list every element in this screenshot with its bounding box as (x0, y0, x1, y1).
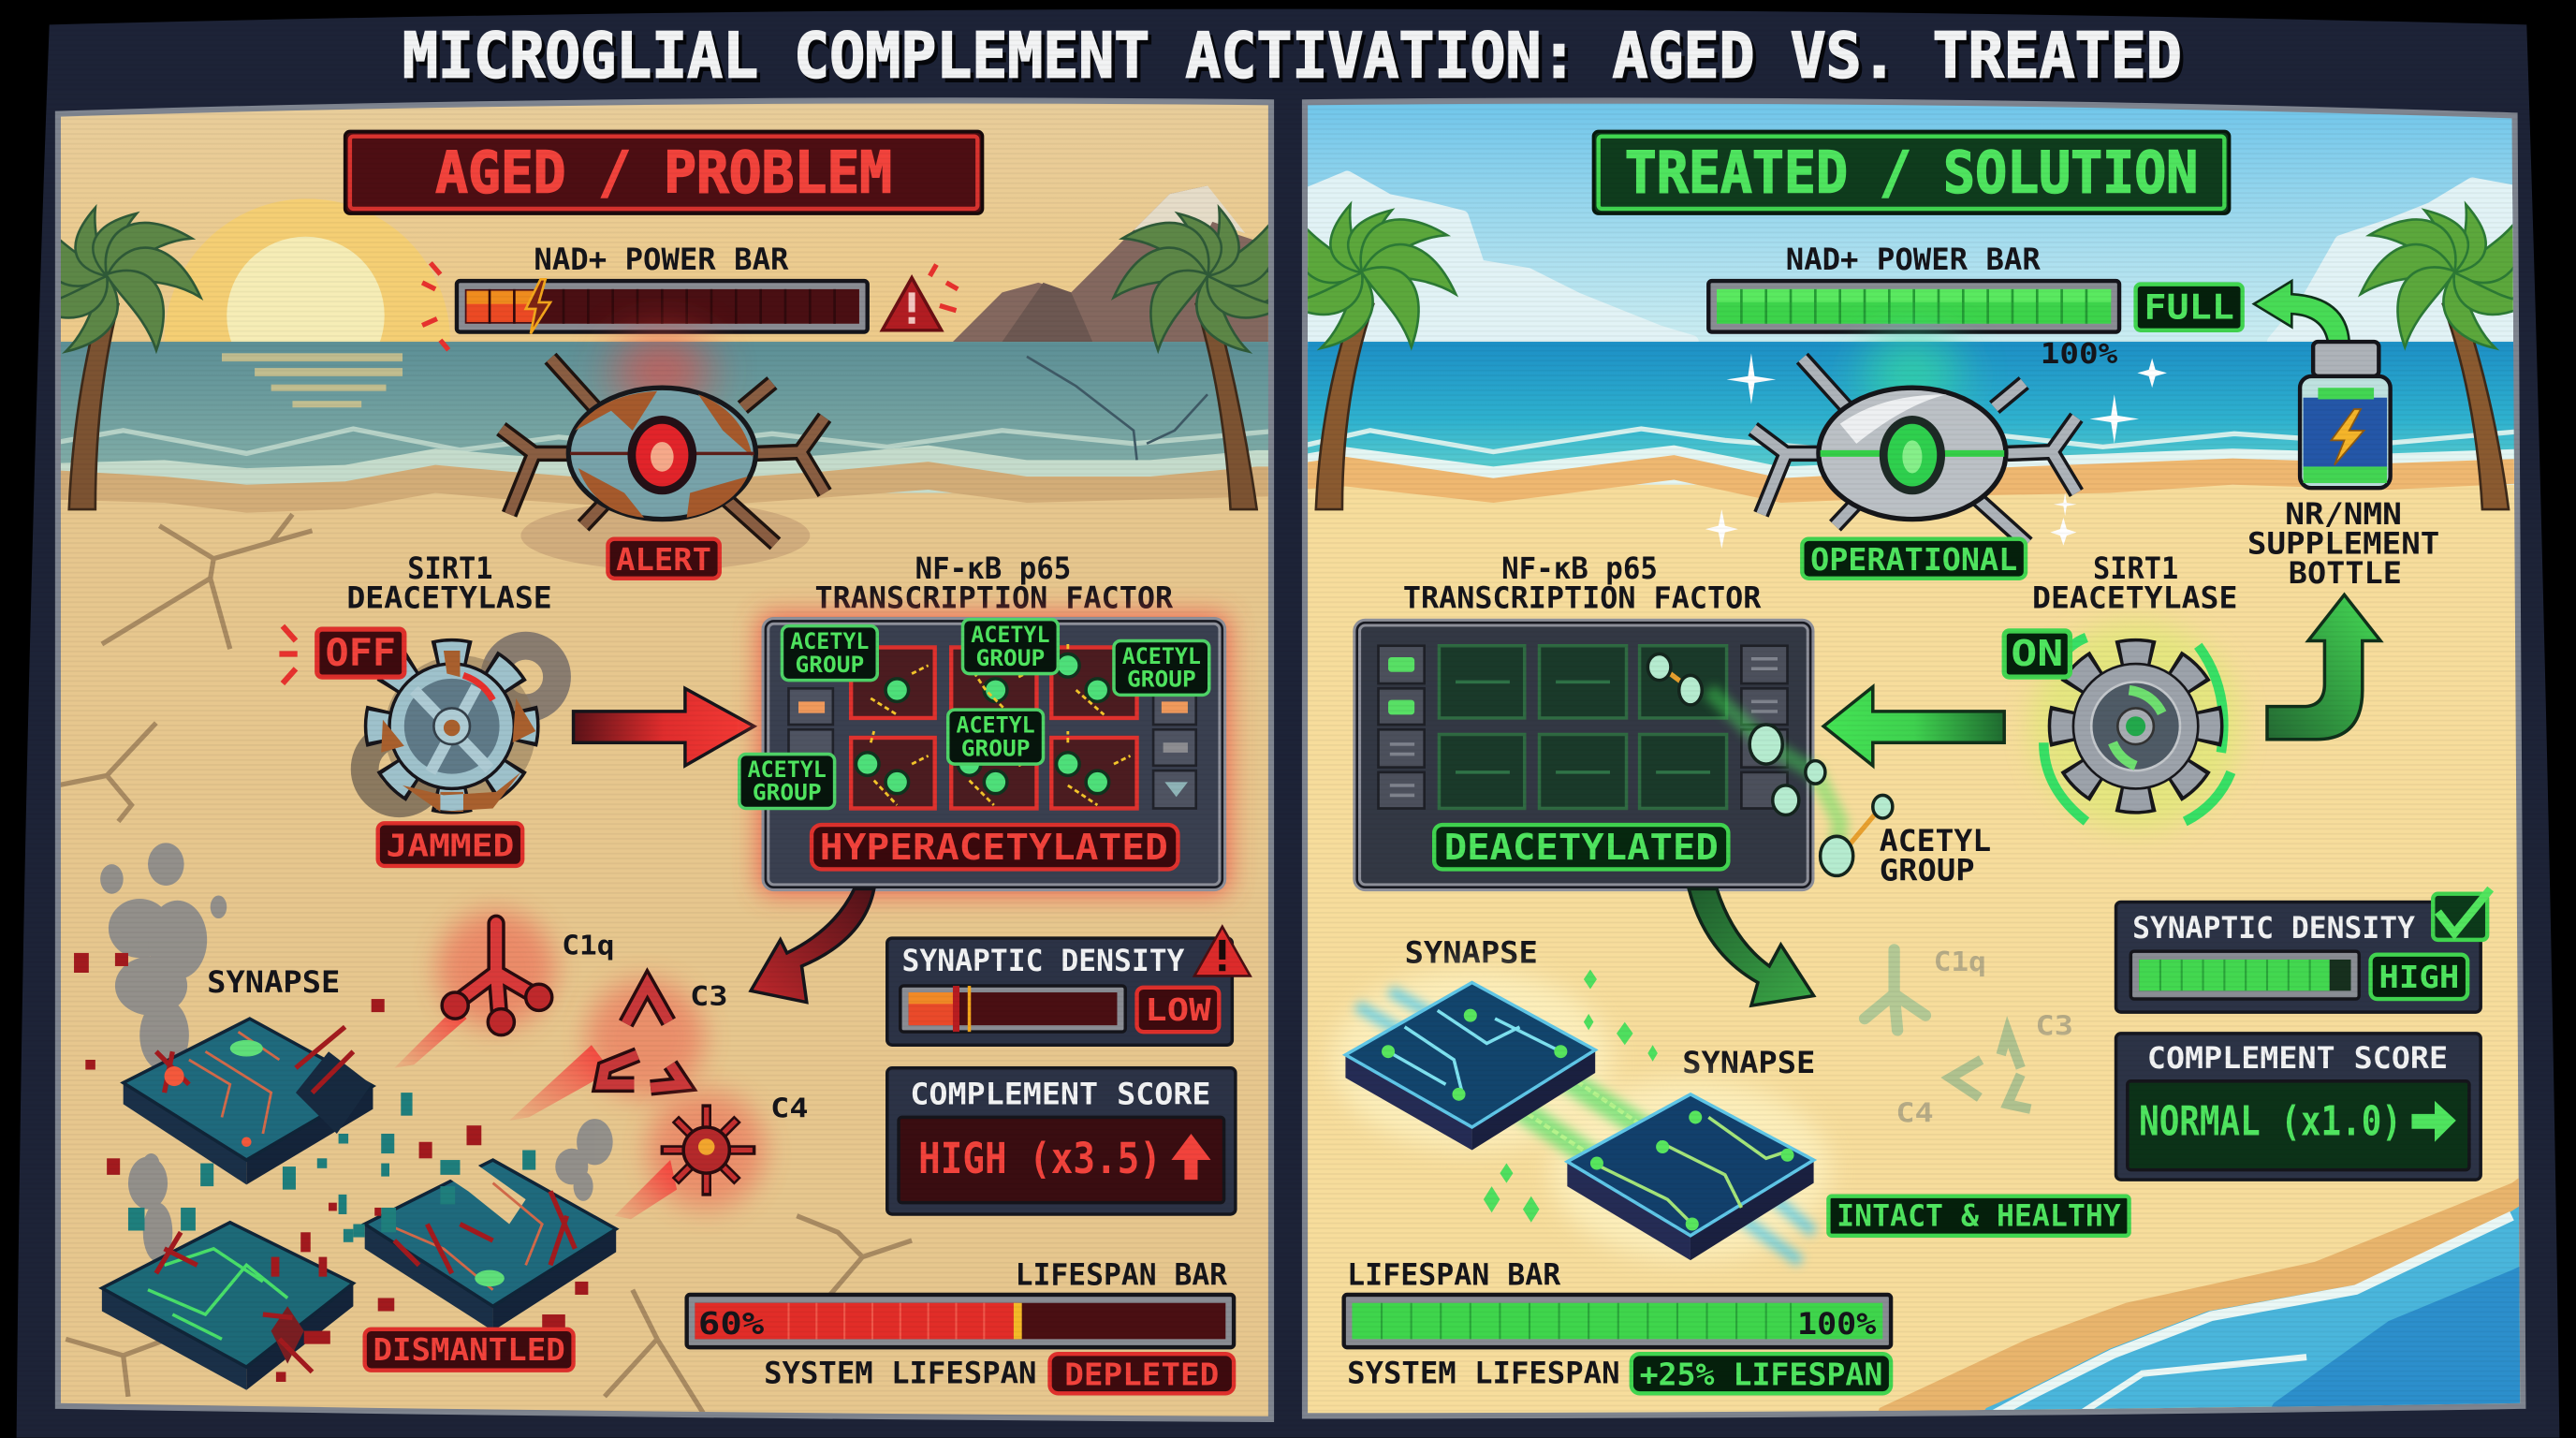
arrow: NF-kB to complement treated (1689, 888, 1814, 1005)
acetylated cells (851, 647, 1137, 808)
palm tree left (61, 204, 204, 511)
icon: faded C3 (1950, 1032, 2030, 1109)
title: MICROGLIAL COMPLEMENT ACTIVATION: AGED VS. TREATED (402, 19, 2182, 92)
badge: off: OFF (326, 631, 396, 675)
tag: acetyl group 4: GROUP (961, 735, 1030, 761)
beach scene: aged (50, 91, 1281, 1430)
panel: complement score treated: COMPLEMENT SCORE (2147, 1042, 2448, 1076)
lifespan bar aged (687, 1258, 1234, 1347)
side buttons (1379, 646, 1788, 808)
sparkles around healthy microglia (1705, 353, 2167, 549)
NAD+ power bar: treated: NAD+ POWER BAR (1786, 243, 2042, 277)
side buttons (788, 688, 1196, 808)
text: supplement bottle label: BOTTLE (2289, 557, 2402, 591)
icon: aged microglia (501, 335, 825, 570)
badge: low (1137, 988, 1219, 1032)
arrow: SIRT1 to NF-kB aged (574, 688, 754, 766)
panel: synaptic density treated: SYNAPTIC DENSITY (2132, 912, 2415, 946)
heading: aged / problem (345, 131, 983, 213)
lifespan bar treated: 100% (1797, 1308, 1876, 1342)
NAD+ power bar: aged: NAD+ POWER BAR (534, 243, 789, 277)
NAD+ power bar: aged (457, 243, 868, 333)
label: synapse aged: SYNAPSE (207, 966, 340, 1000)
lifespan bar treated (1344, 1258, 1891, 1347)
icon: warning triangle synaptic (1194, 927, 1251, 976)
text: supplement bottle label (2247, 498, 2439, 591)
molecules leaving NF-kB (1647, 654, 1893, 875)
text: supplement bottle label: SUPPLEMENT (2247, 527, 2439, 561)
badge: jammed (378, 823, 522, 866)
badge: alert: ALERT (616, 541, 711, 578)
lifespan bar treated: LIFESPAN BAR (1347, 1258, 1561, 1292)
NAD+ power bar: treated (1708, 243, 2119, 332)
system lifespan treated: +25% LIFESPAN (1640, 1356, 1882, 1392)
panel: synaptic density aged: LOW (1145, 991, 1212, 1028)
label: acetyl group treated: ACETYL (1880, 825, 1991, 858)
empty cells (1439, 646, 1727, 808)
tag: acetyl group 1 (782, 626, 877, 681)
icon: active gear (2030, 621, 2241, 831)
tag: acetyl group 5: ACETYL (748, 756, 827, 783)
icon: damaged synapse chip 2 (365, 1158, 616, 1331)
green sparkles near synapses (1484, 969, 1658, 1223)
arrow: NF-kB to complement aged (751, 888, 874, 1003)
badge: intact and healthy: INTACT & HEALTHY (1837, 1197, 2121, 1233)
label: faded C1q: C1q (1934, 946, 1986, 977)
tag: acetyl group 3: GROUP (1127, 667, 1196, 693)
panel: complement score treated: NORMAL (x1.0) (2139, 1098, 2402, 1146)
debris (74, 953, 588, 1382)
label: hyperacetylated: HYPERACETYLATED (820, 827, 1168, 869)
label: acetyl group treated: GROUP (1880, 855, 1975, 888)
label: SIRT1 treated (2032, 552, 2237, 615)
icon: check box (2433, 888, 2491, 940)
label: synapse treated 2: SYNAPSE (1682, 1047, 1815, 1080)
icon: C1q (394, 910, 555, 1068)
tag: acetyl group 5: GROUP (753, 780, 822, 806)
icon: faded C1q (1865, 949, 1925, 1030)
text: supplement bottle label: NR/NMN (2285, 498, 2402, 532)
tag: acetyl group 2 (963, 620, 1058, 674)
label: C4: C4 (770, 1093, 809, 1123)
badge: full (2136, 285, 2243, 330)
panel: complement score aged: HIGH (x3.5) (918, 1134, 1162, 1183)
beach scene: treated (1298, 91, 2530, 1430)
palm tree right (1111, 204, 1268, 511)
tag: acetyl group 3 (1114, 640, 1209, 695)
label: SIRT1 aged (346, 552, 552, 615)
tag: acetyl group 1: ACETYL (790, 628, 869, 654)
palm tree left (1308, 200, 1458, 511)
smoke (100, 843, 613, 1262)
icon: healthy microglia (1753, 339, 2076, 544)
icon: jammed gear (365, 646, 557, 812)
icon: C3 (509, 979, 705, 1121)
panel: synaptic density treated: HIGH (2378, 959, 2459, 995)
label: NF-kB treated: TRANSCRIPTION FACTOR (1403, 581, 1762, 615)
label: NF-kB treated (1403, 552, 1762, 615)
label: SIRT1 aged: SIRT1 (407, 552, 493, 586)
icon: bolt (526, 279, 550, 333)
label: acetyl group treated (1880, 825, 1991, 888)
panel: complement score treated (2116, 1034, 2481, 1180)
panel: synaptic density treated (2116, 902, 2481, 1012)
tag: acetyl group 5 (739, 755, 835, 808)
icon: right arrow (2411, 1101, 2456, 1142)
text: 100%: 100% (2041, 338, 2117, 371)
panel: complement score aged (887, 1068, 1236, 1214)
badge: operational: OPERATIONAL (1810, 541, 2017, 578)
label: C3: C3 (690, 981, 728, 1012)
heading: aged / problem: AGED / PROBLEM (435, 139, 892, 206)
heading: treated / solution: TREATED / SOLUTION (1625, 139, 2198, 206)
tag: acetyl group 3: ACETYL (1122, 643, 1201, 669)
icon: warning triangle with sparks (422, 263, 958, 350)
arrow: bottle to full (2254, 281, 2349, 342)
label: deacetylated: DEACETYLATED (1444, 827, 1719, 869)
label: C1q: C1q (562, 931, 614, 961)
badge: dismantled: DISMANTLED (373, 1331, 565, 1368)
label: SIRT1 treated: SIRT1 (2093, 552, 2178, 586)
label: NF-kB aged: TRANSCRIPTION FACTOR (815, 581, 1174, 615)
arrow: SIRT1 to NF-kB treated (1823, 687, 2004, 766)
label: NF-kB treated: NF-κB p65 (1501, 552, 1658, 586)
badge: high (2371, 955, 2467, 999)
tag: acetyl group 4: ACETYL (956, 712, 1035, 739)
label: NF-kB aged: NF-κB p65 (915, 552, 1071, 586)
badge: on (2004, 631, 2070, 677)
icon: healthy synapse chip 1 (1345, 983, 1595, 1151)
label: synapse treated 1: SYNAPSE (1405, 936, 1538, 970)
tag: acetyl group 4 (948, 710, 1044, 764)
bottom-right shore (1879, 1178, 2520, 1411)
system lifespan aged: DEPLETED (1064, 1356, 1219, 1392)
molecules (856, 654, 1109, 794)
panel: NF-kB deacetylated (1357, 623, 1810, 888)
label: NF-kB aged (815, 552, 1174, 615)
tag: acetyl group 2: ACETYL (971, 622, 1050, 648)
lifespan bar aged: 60% (698, 1305, 764, 1342)
panel: synaptic density aged (887, 938, 1232, 1045)
badge: off (279, 626, 404, 683)
label: faded C3: C3 (2036, 1011, 2073, 1042)
panel: treated / solution (1263, 91, 2554, 1430)
label: faded C4: C4 (1895, 1098, 1934, 1129)
palm tree right (2358, 200, 2513, 511)
badge: on: ON (2011, 633, 2063, 675)
system lifespan aged: SYSTEM LIFESPAN (764, 1357, 1036, 1391)
system lifespan treated: SYSTEM LIFESPAN (1347, 1357, 1620, 1391)
icon: healthy synapse chip 2 (1567, 1094, 1814, 1260)
lifespan bar aged: LIFESPAN BAR (1016, 1258, 1228, 1292)
label: SIRT1 treated: DEACETYLASE (2032, 581, 2237, 615)
icon: C4 (614, 1091, 766, 1219)
icon: damaged synapse chip 1 (124, 1019, 373, 1184)
panel: synaptic density aged: SYNAPTIC DENSITY (902, 945, 1184, 978)
icon: damaged synapse chip 3 (102, 1223, 353, 1390)
badge: full: FULL (2144, 286, 2234, 327)
tag: acetyl group 2: GROUP (976, 645, 1045, 671)
system lifespan treated (1347, 1354, 1891, 1393)
panel: NF-kB hyperacetylated (759, 614, 1229, 894)
badge: jammed: JAMMED (386, 827, 514, 863)
cracks in sand (57, 514, 912, 1413)
panel: complement score aged: COMPLEMENT SCORE (910, 1078, 1211, 1111)
arrow: gear to bottle (2267, 594, 2380, 740)
title: MICROGLIAL COMPLEMENT ACTIVATION: AGED VS. TREATED (406, 23, 2185, 96)
tag: acetyl group 1: GROUP (795, 652, 864, 678)
system lifespan aged (764, 1354, 1234, 1393)
icon: up arrow (1171, 1134, 1211, 1180)
label: SIRT1 aged: DEACETYLASE (346, 581, 552, 615)
panel: aged / problem (7, 91, 1307, 1430)
synapse glow and beams (1332, 969, 1830, 1262)
icon: supplement bottle (2300, 342, 2391, 488)
